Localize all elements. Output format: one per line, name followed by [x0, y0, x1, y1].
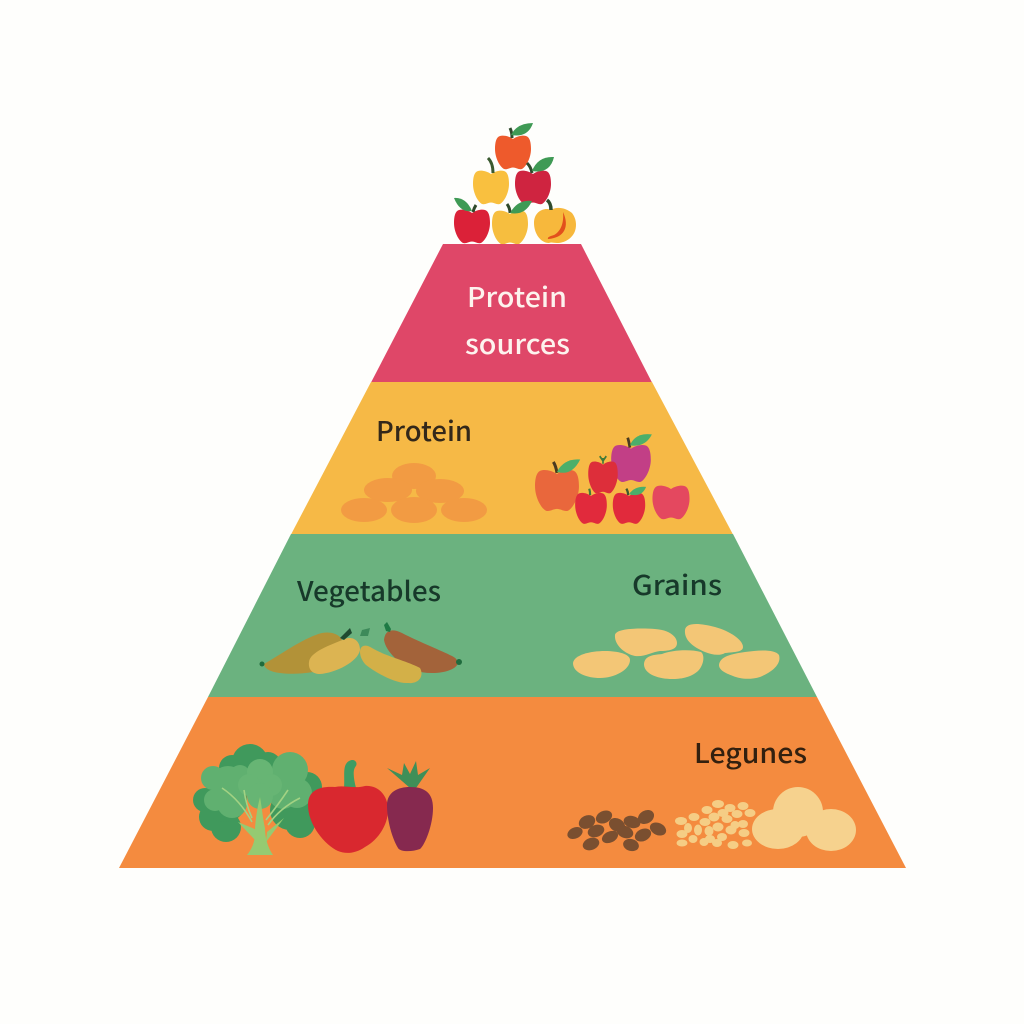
icon: red pepper [308, 760, 388, 853]
icon: broccoli [193, 744, 322, 855]
pyramid tier: legumes and vegetables [119, 697, 906, 868]
label: protein sources: Protein [467, 276, 567, 315]
icon: grain pile [573, 624, 779, 679]
icon: purple fruit [387, 761, 433, 851]
icon: brown beans [565, 807, 668, 853]
label: grains: Grains [632, 564, 722, 603]
label: vegetables: Vegetables [296, 570, 441, 609]
label: legumes: Legunes [694, 732, 807, 771]
label: protein: Protein [376, 410, 472, 449]
icon: stacked fruit on the pyramid top [454, 123, 576, 244]
icon: orange oval pile [341, 463, 487, 523]
pyramid tier: vegetables and grains [208, 534, 817, 697]
icon: squash group [260, 622, 462, 683]
label: protein sources [465, 276, 570, 362]
icon: apple group [535, 434, 690, 524]
label: protein sources: sources [465, 323, 570, 362]
pyramid tier: protein sources [371, 244, 652, 382]
icon: large round legumes [752, 787, 856, 851]
icon: pale seeds [675, 800, 756, 849]
pyramid tier: protein [291, 382, 733, 534]
